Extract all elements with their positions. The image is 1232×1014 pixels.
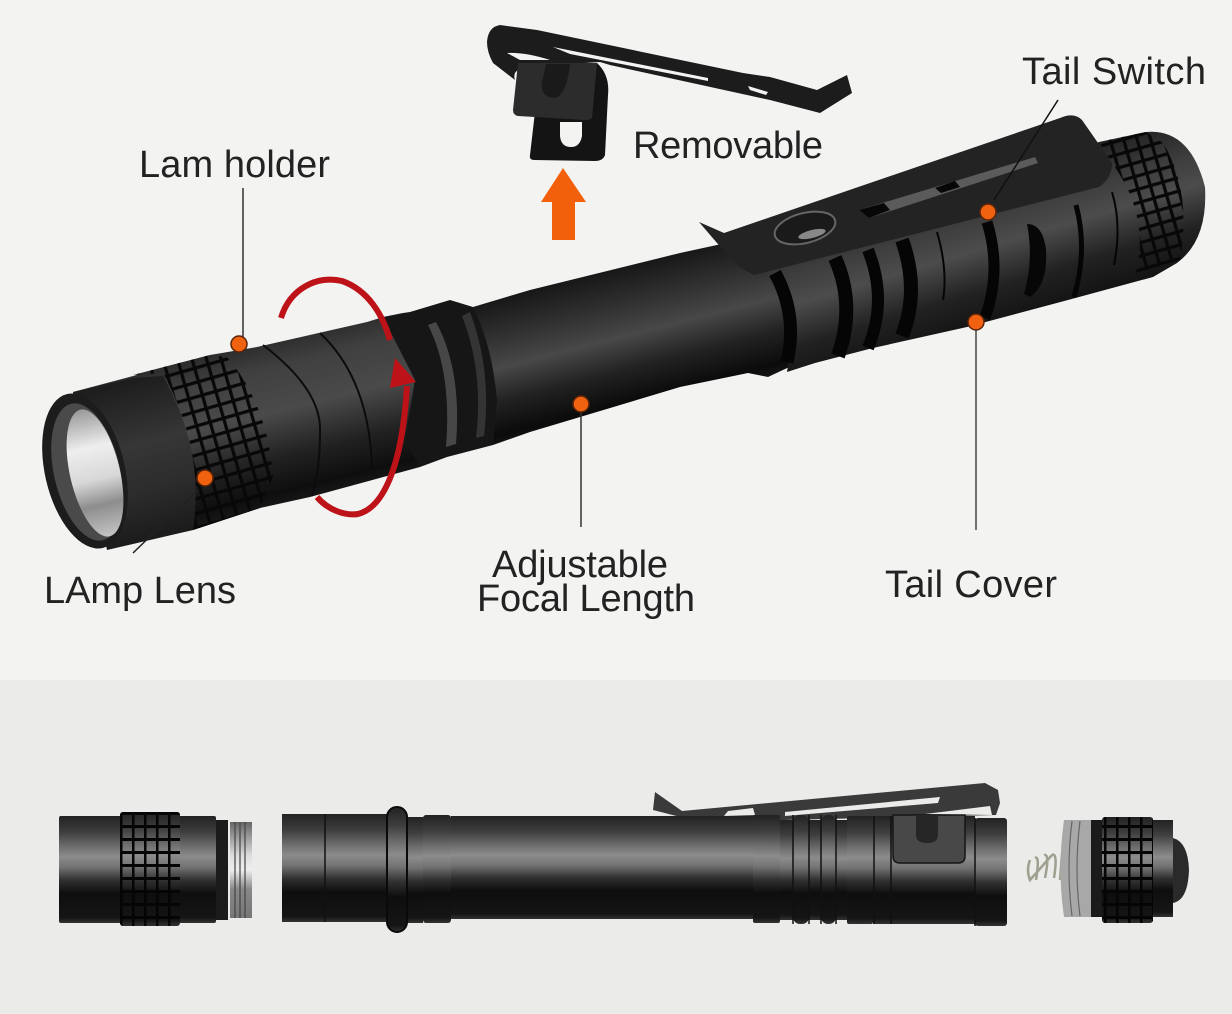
- label: lam holder: Lam holder: [139, 144, 330, 186]
- flashlight: disassembled tail cap: [1060, 817, 1189, 923]
- lens rim: [28, 385, 142, 557]
- switch tab: [893, 815, 965, 863]
- lens reflector: [56, 404, 134, 542]
- focus ring: [383, 300, 497, 467]
- callout: lamp holder: [231, 188, 247, 352]
- label: adjustable focal length: Adjustable: [492, 544, 668, 586]
- panel: top background: [0, 0, 1232, 680]
- label: lamp lens: LAmp Lens: [44, 570, 236, 612]
- tail section: [770, 132, 1205, 372]
- callout: lamp lens: [133, 470, 213, 553]
- tail knurl: [1099, 132, 1184, 273]
- panel: bottom background: [0, 680, 1232, 1014]
- label: adjustable focal length: [477, 544, 695, 620]
- spring: [1028, 854, 1062, 880]
- callout: tail cover: [968, 314, 984, 530]
- label: removable: Removable: [633, 125, 823, 167]
- tail grooves: [775, 192, 1118, 362]
- flashlight: disassembled main body: [282, 783, 1007, 932]
- flashlight: disassembled head section: [59, 812, 252, 926]
- tail side slot: [1024, 224, 1046, 297]
- flashlight: assembled, angled view: [28, 115, 1205, 557]
- pocket clip: [699, 115, 1112, 275]
- label: adjustable focal length: Focal Length: [477, 578, 695, 620]
- removable clip: [487, 25, 852, 161]
- arrow: removal direction: [541, 168, 586, 240]
- head barrel and lam holder: [73, 317, 420, 548]
- head collar: [73, 376, 196, 550]
- callout: adjustable focal length: [573, 396, 589, 527]
- label: tail switch: Tail Switch: [1022, 51, 1206, 93]
- barrel seam lines: [263, 333, 372, 496]
- clip on body: [653, 783, 1000, 822]
- label: tail cover: Tail Cover: [885, 564, 1057, 606]
- body tube: [473, 240, 800, 445]
- seams: [325, 814, 975, 926]
- callout: tail switch: [980, 100, 1058, 220]
- rotation arrows: [281, 280, 416, 514]
- head knurl: [133, 355, 273, 530]
